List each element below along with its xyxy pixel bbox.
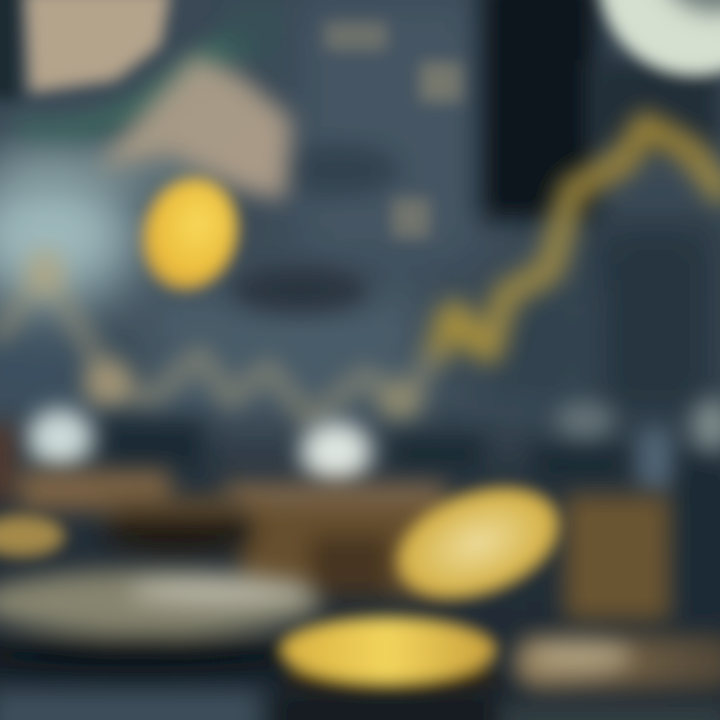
icon: wooden coin bottom right	[515, 636, 720, 688]
icon: pale disc top right	[600, 0, 720, 75]
panel: dark lower foreground	[0, 690, 720, 720]
panel: dark edge top left	[0, 0, 20, 100]
panel: green tinted band	[15, 0, 300, 139]
panel: dark band above table	[100, 420, 720, 615]
icon: flat gold coin foreground	[280, 618, 498, 694]
panel: wooden table band	[0, 425, 670, 620]
icon: pale round markers	[28, 399, 720, 490]
chart: pale zigzag line left	[0, 248, 430, 420]
panel: beige paper centre left	[95, 55, 292, 200]
panel: dark coin stack left	[103, 498, 253, 555]
icon: floating gold coin	[130, 167, 250, 301]
chart: faint tan squares	[325, 22, 462, 238]
background: upper haze panels	[0, 0, 720, 420]
panel: silver plate	[0, 570, 322, 677]
panel: beige paper top left	[25, 0, 170, 92]
chart: golden rising line right	[438, 125, 720, 350]
icon: tilted gold coin centre right	[382, 467, 574, 619]
panel: dark vertical block top right	[482, 0, 720, 220]
icon: small gold coin far left	[0, 516, 64, 556]
panel: pale teal mist at left	[0, 150, 210, 305]
